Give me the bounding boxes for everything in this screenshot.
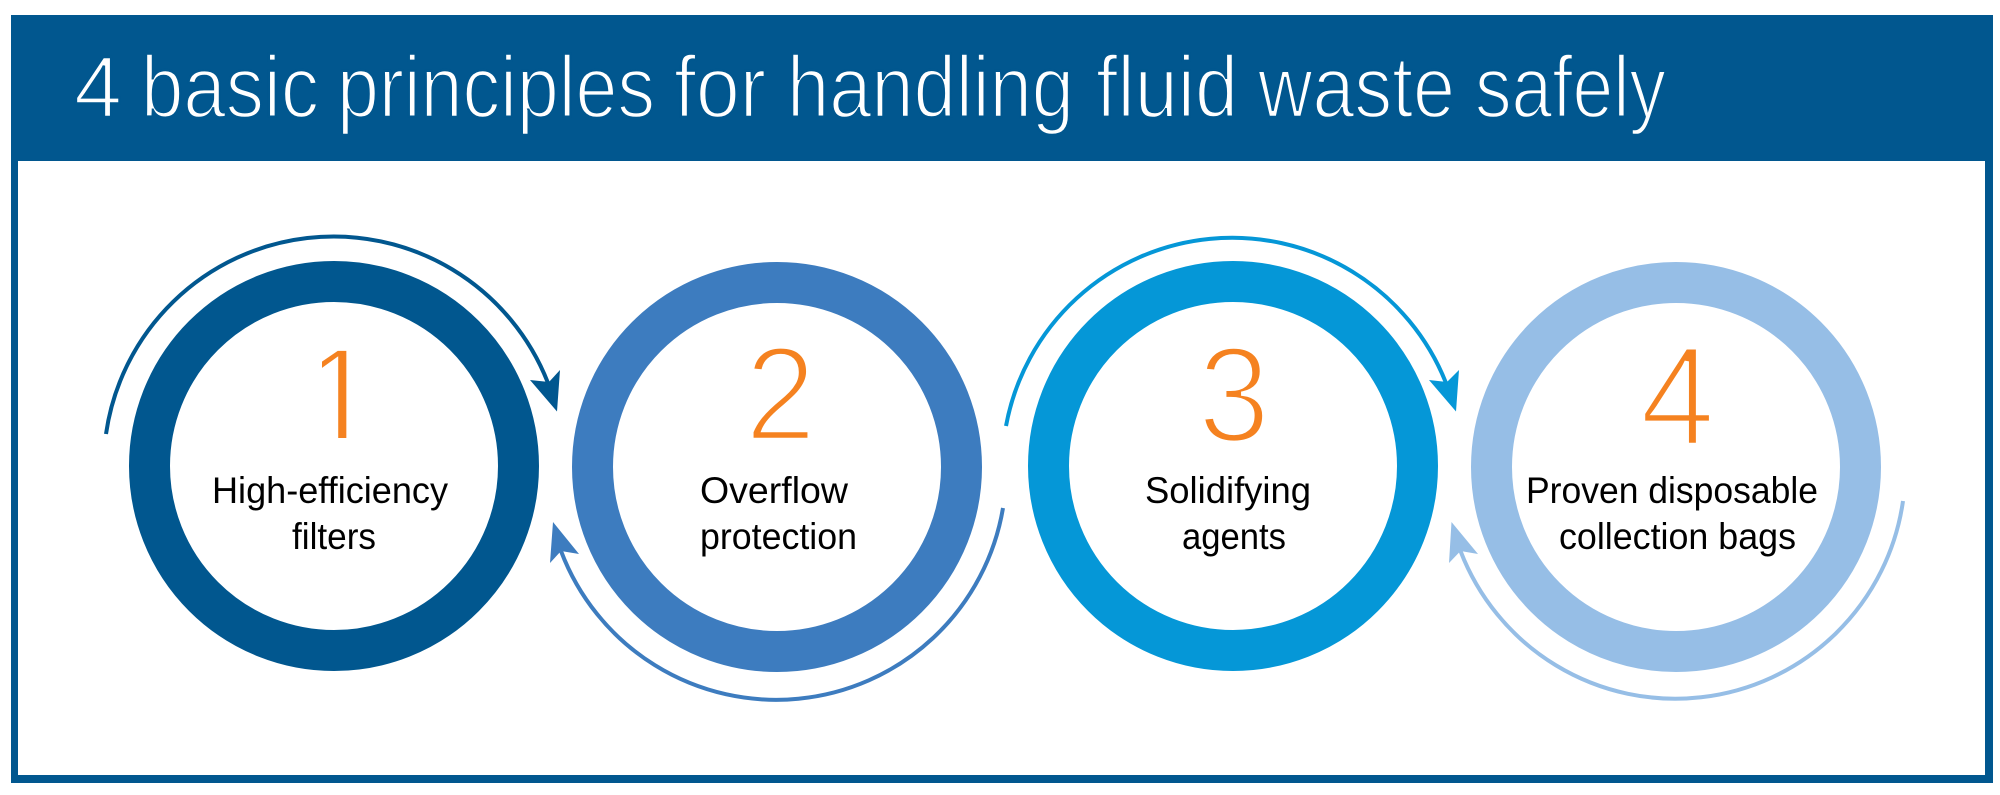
label 4: Proven disposable [1526, 470, 1818, 511]
step 4: proven disposable collection bags [1449, 282, 1903, 699]
title: basic [141, 39, 319, 136]
ring 1 [150, 282, 518, 650]
title: safely [1475, 39, 1666, 136]
label 2: Overflow [700, 470, 848, 511]
arrow 3 [1006, 238, 1459, 426]
number 2: 2 [745, 320, 816, 469]
step 3: solidifying agents [1006, 238, 1459, 651]
title: waste [1257, 39, 1455, 136]
label 4: collection bags [1559, 516, 1796, 557]
ring 2 [592, 282, 962, 652]
ring 4 [1492, 282, 1860, 652]
step 2: overflow protection [550, 282, 1003, 700]
title: fluid [1096, 39, 1238, 136]
label 2: protection [700, 516, 857, 557]
number 3: 3 [1198, 318, 1270, 470]
step 1: high-efficiency filters [106, 236, 560, 650]
title [74, 39, 1666, 136]
arrow 1 [106, 236, 560, 434]
label 3: Solidifying [1145, 470, 1311, 511]
label 3: agents [1182, 516, 1286, 557]
arrow 4 [1449, 501, 1903, 699]
arrow 2 [550, 508, 1003, 700]
number 4: 4 [1640, 317, 1715, 476]
title: principles [337, 39, 655, 136]
title: handling [787, 39, 1074, 136]
title: 4 [74, 39, 122, 136]
title: for [674, 39, 766, 136]
label 1: filters [292, 516, 376, 557]
ring 3 [1048, 282, 1418, 650]
label 1: High-efficiency [212, 470, 448, 511]
number 1: 1 [300, 319, 380, 478]
